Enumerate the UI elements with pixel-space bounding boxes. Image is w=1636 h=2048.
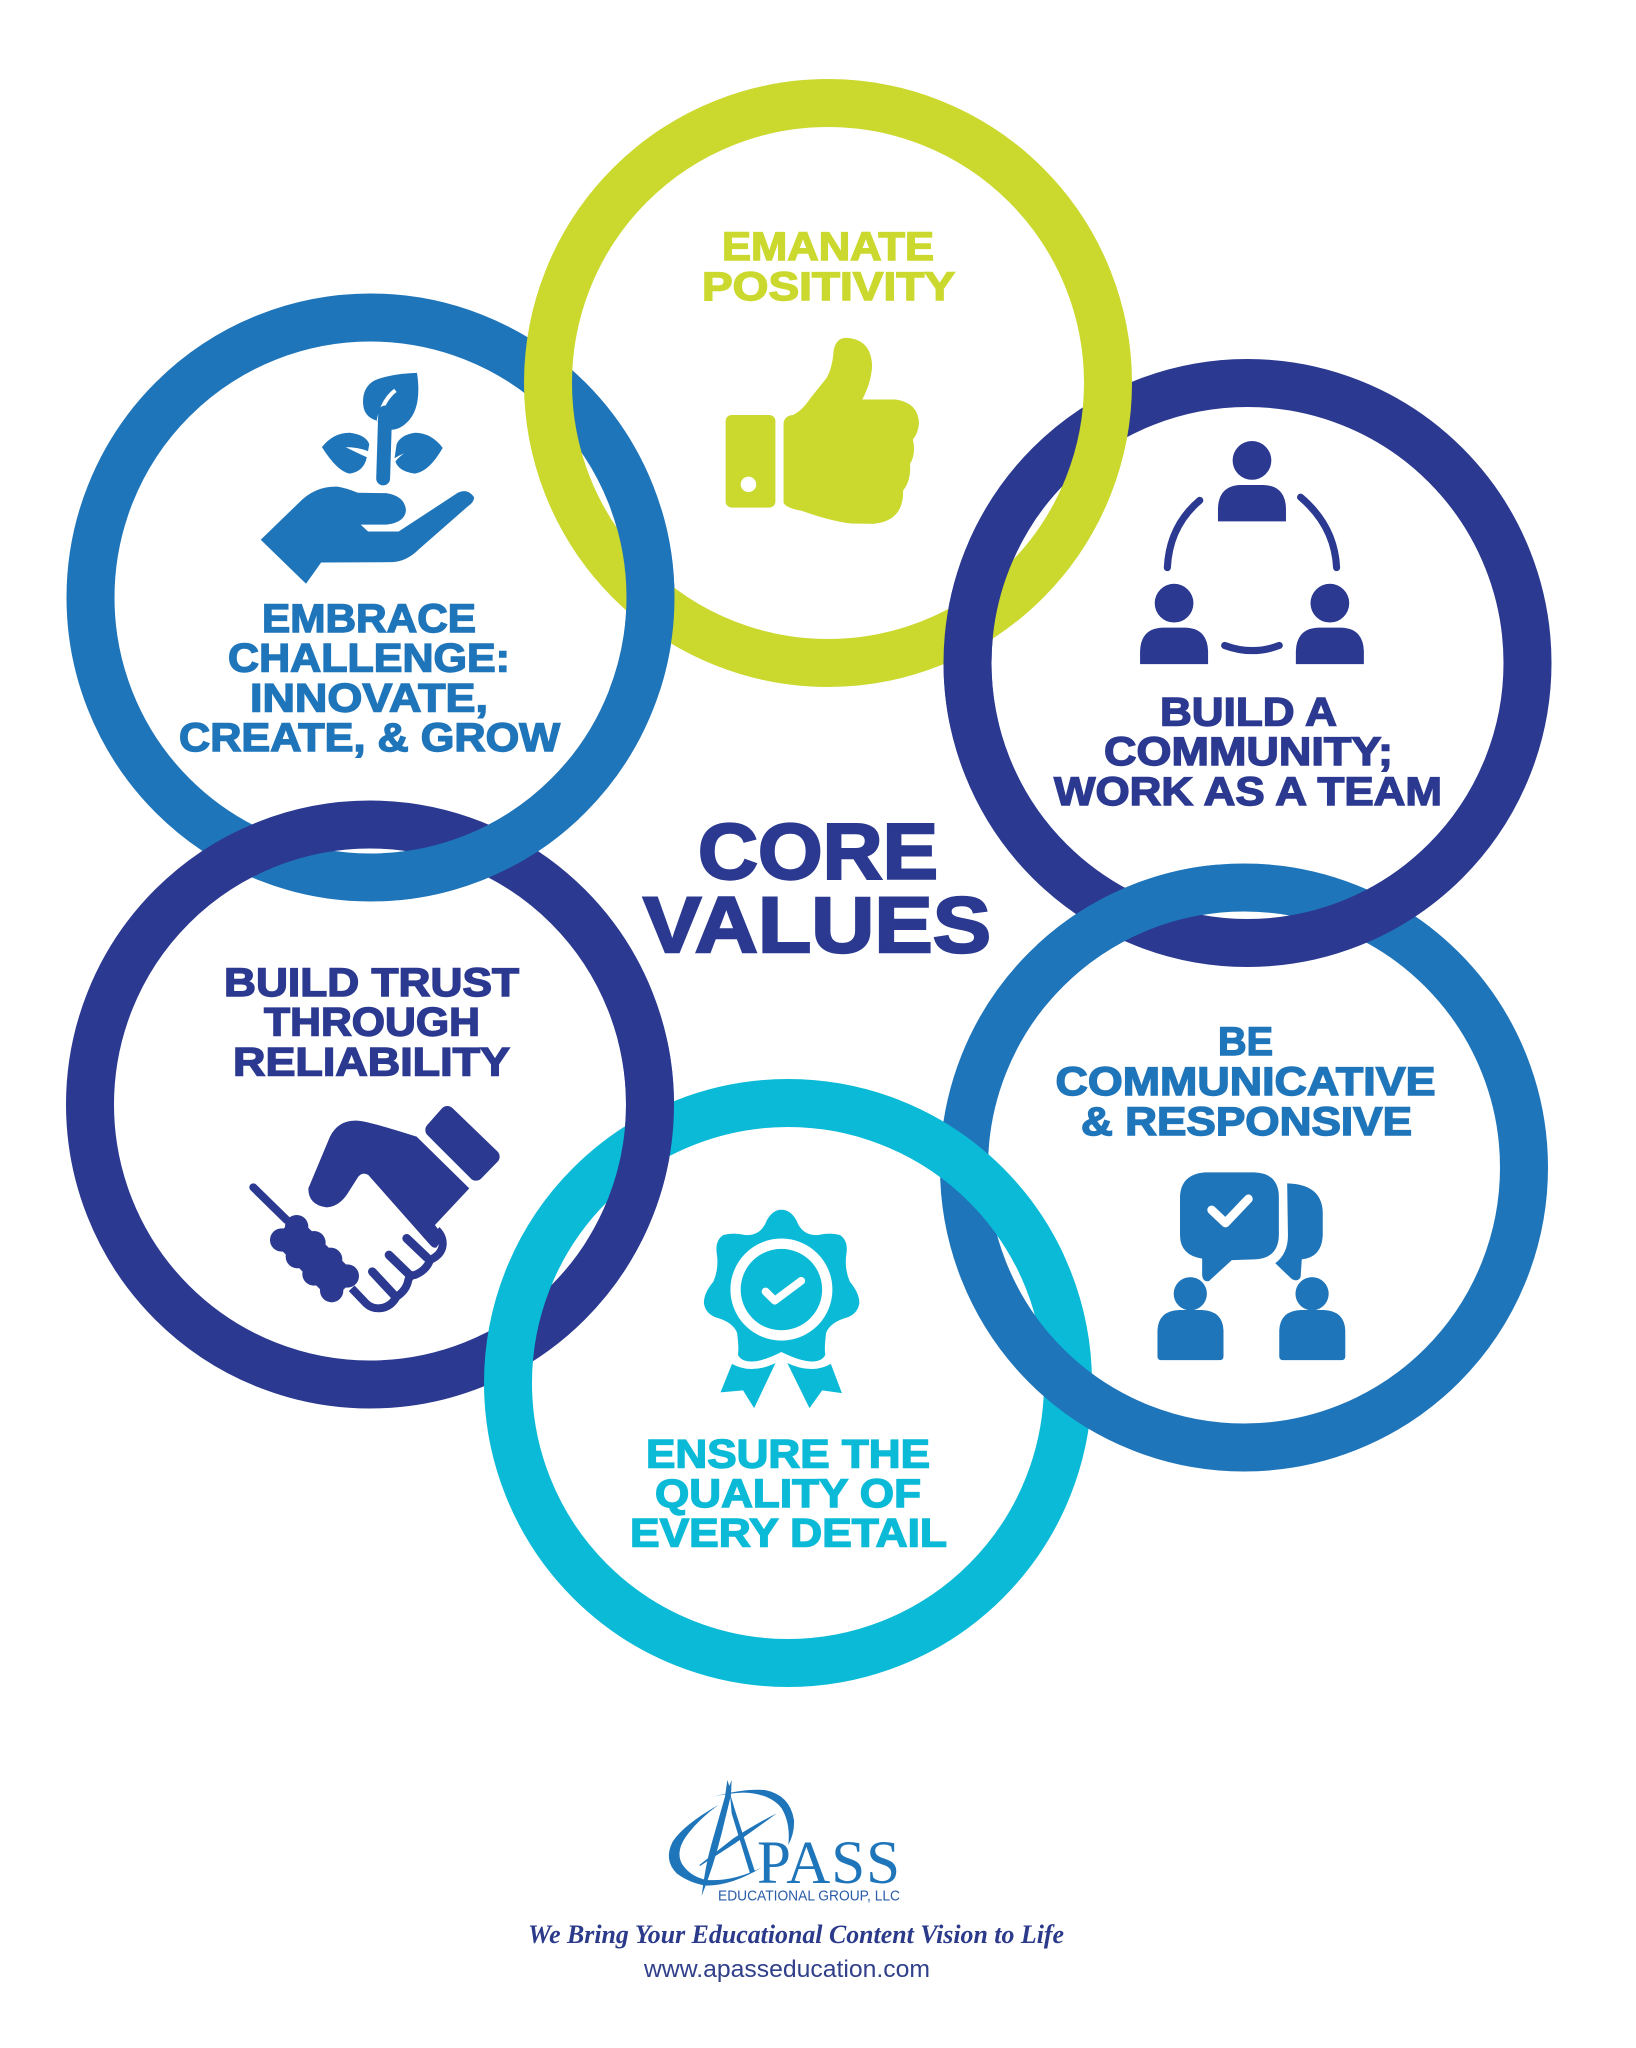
interlocked rings [90,103,1528,1663]
weave overlap: cyan over blue [864,1088,1064,1265]
ring: build community [968,383,1528,943]
ring: be communicative [964,888,1524,1448]
heading: build trust: THROUGH [264,1000,480,1044]
icon: two people speech bubbles [1157,1172,1345,1360]
heading: build trust: RELIABILITY [233,1040,510,1084]
heading: embrace challenge: CREATE, & GROW [179,716,561,760]
heading: build trust [224,961,519,1084]
weave overlap: blue over navy right [1037,864,1217,1005]
icon: team of three people [1140,441,1364,664]
heading: embrace challenge: EMBRACE [262,597,476,641]
ring: emanate positivity [548,103,1108,663]
panel: build a community [1054,441,1442,814]
tagline: We Bring Your Educational Content Vision to Life [528,1920,1064,1949]
heading: be communicative: BE [1218,1020,1273,1064]
logo wordmark: pass: PASS [757,1830,900,1897]
website url: www.apasseducation.com [643,1956,930,1983]
heading: be communicative: & RESPONSIVE [1081,1100,1412,1144]
heading: be communicative: COMMUNICATIVE [1056,1060,1436,1104]
heading: build a community [1054,690,1442,814]
ring: build trust [90,824,650,1384]
title: core values: VALUES [643,880,991,969]
heading: embrace challenge: CHALLENGE: [228,636,510,680]
title: core values: CORE [698,806,938,896]
heading: build a community: WORK AS A TEAM [1054,770,1442,814]
title: core values [643,806,991,969]
logo: apass compass mark [669,1780,794,1896]
icon: handshake [253,1113,492,1308]
logo subtitle: EDUCATIONAL GROUP, LLC [718,1888,900,1905]
icon: hand holding plant [261,373,474,584]
heading: embrace challenge [179,597,561,760]
footer: apass logo and contact [528,1780,1064,1983]
panel: be communicative [1056,1020,1436,1360]
icon: thumbs up [726,338,919,524]
heading: ensure quality [630,1432,947,1556]
panel: emanate positivity [702,225,955,524]
ring: ensure quality [508,1103,1068,1663]
weave overlap: navy over cyan [586,1041,674,1241]
heading: build a community: BUILD A [1160,690,1337,734]
ring: embrace challenge [90,318,650,878]
heading: ensure quality: EVERY DETAIL [630,1512,947,1556]
panel: embrace challenge [179,373,561,760]
heading: emanate positivity [702,225,955,309]
heading: ensure quality: QUALITY OF [655,1472,921,1516]
weave overlap: navy over green [944,524,1032,724]
heading: emanate positivity: EMANATE [722,225,934,269]
heading: build trust: BUILD TRUST [224,961,519,1005]
heading: be communicative [1056,1020,1436,1144]
panel: ensure quality [630,1210,947,1556]
heading: ensure quality: ENSURE THE [646,1432,930,1476]
heading: emanate positivity: POSITIVITY [702,265,955,309]
icon: award rosette with check [704,1210,859,1408]
weave overlap: blue over green [609,510,674,690]
weave overlap: blue over navy left [399,761,579,900]
heading: build a community: COMMUNITY; [1104,730,1393,774]
panel: build trust [224,961,519,1308]
heading: embrace challenge: INNOVATE, [250,676,488,720]
